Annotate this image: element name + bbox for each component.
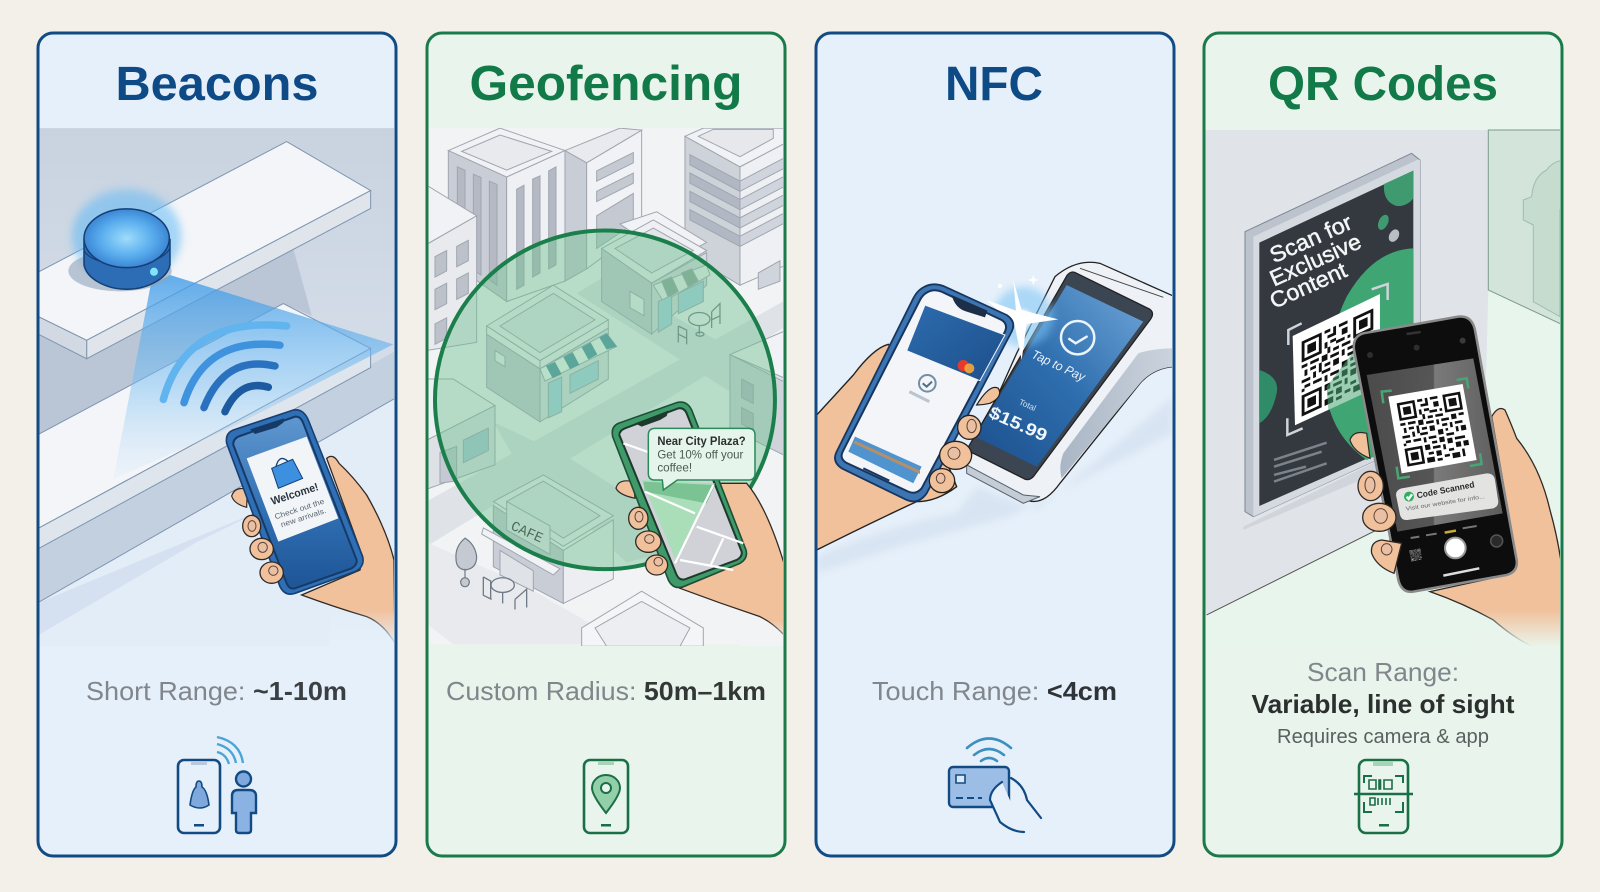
- cafe sign text: CAFE: [508, 519, 545, 547]
- phone and hand: [226, 410, 395, 643]
- poster text: Exclusive: [1266, 229, 1365, 291]
- nfc illustration: phone tapping payment terminal: Tap to Pay: [1029, 347, 1088, 385]
- hand fade: [740, 620, 783, 647]
- phone body: [612, 402, 746, 587]
- poster frame: [1245, 153, 1420, 517]
- geofencing card background: [427, 33, 785, 856]
- hand: [1430, 408, 1562, 647]
- qr range text: Scan Range:: [1307, 657, 1459, 687]
- phone and hand: new arrivals.: [279, 506, 327, 529]
- qr range text: Variable, line of sight: [1252, 689, 1515, 719]
- hand fade: [349, 612, 394, 643]
- sparkle: [993, 287, 1053, 347]
- phone body: [1354, 316, 1517, 592]
- geofencing border: [427, 33, 785, 856]
- icon: contactless card in hand: [949, 738, 1041, 832]
- phone and hand with notification: coffee!: [657, 462, 692, 475]
- nfc illustration: phone tapping payment terminal: Total: [1017, 397, 1038, 413]
- qr card background: [1204, 33, 1562, 856]
- fingers: [629, 507, 668, 575]
- poster text: Scan for: [1266, 209, 1356, 268]
- panel: qr codes: [1200, 33, 1567, 856]
- icon: phone with shopper and signal: [178, 737, 256, 833]
- beacons range label: Short Range: ~1-10m: [86, 676, 347, 706]
- phone and hand with notification: Near City Plaza?: [657, 435, 746, 448]
- hand fade: [1476, 612, 1560, 646]
- hand: [302, 456, 395, 643]
- qr title: QR Codes: [1268, 58, 1498, 111]
- icon: phone scanning qr code: [1354, 760, 1413, 833]
- phone and hand: Code Scanned: [1416, 479, 1475, 500]
- panel: beacons: [37, 33, 397, 856]
- geofencing illustration: isometric city with radius circle: [427, 128, 787, 647]
- fingers: [1358, 471, 1402, 573]
- phone and hand: Welcome!: [270, 481, 320, 508]
- phone and hand: [1350, 316, 1562, 647]
- nfc title: NFC: [945, 58, 1043, 111]
- terminal body: [967, 262, 1173, 501]
- phone body: [226, 410, 363, 594]
- poster text: Content: [1266, 257, 1351, 314]
- nfc illustration: phone tapping payment terminal: [817, 262, 1173, 573]
- poster text: [1269, 216, 1361, 307]
- qr border: [1204, 33, 1562, 856]
- nfc border: [816, 33, 1174, 856]
- phone and hand: Check out the: [273, 497, 325, 521]
- qr range text: [1252, 657, 1515, 748]
- fingers: [243, 515, 283, 583]
- phone and hand: Visit our website for info...: [1405, 494, 1486, 513]
- hand: [680, 483, 784, 635]
- nfc range label: Touch Range: <4cm: [872, 676, 1117, 706]
- geofencing range label: Custom Radius: 50m–1km: [446, 676, 766, 706]
- notification bubble: [648, 428, 755, 490]
- panel: geofencing: [427, 33, 787, 856]
- panel: nfc: [816, 33, 1174, 856]
- qr range text: Requires camera & app: [1277, 726, 1489, 748]
- hand: [817, 344, 957, 550]
- beacons illustration: store shelves with beacon: [37, 128, 397, 648]
- geofence circle: [435, 231, 775, 569]
- beacons title: Beacons: [116, 58, 318, 111]
- beacons card background: [38, 33, 396, 856]
- geofencing title: Geofencing: [470, 57, 742, 111]
- icon: phone with location pin: [584, 760, 628, 833]
- phone: [835, 284, 1013, 501]
- qr illustration: poster and phone scanning: [1200, 130, 1567, 650]
- fingers: [929, 415, 981, 493]
- phone and hand with notification: [612, 402, 784, 635]
- phone and hand with notification: Get 10% off your: [657, 448, 743, 461]
- beacons border: [38, 33, 396, 856]
- nfc card background: [816, 33, 1174, 856]
- thumb behind phone: [977, 387, 1000, 405]
- nfc illustration: phone tapping payment terminal: $15.99: [986, 402, 1050, 445]
